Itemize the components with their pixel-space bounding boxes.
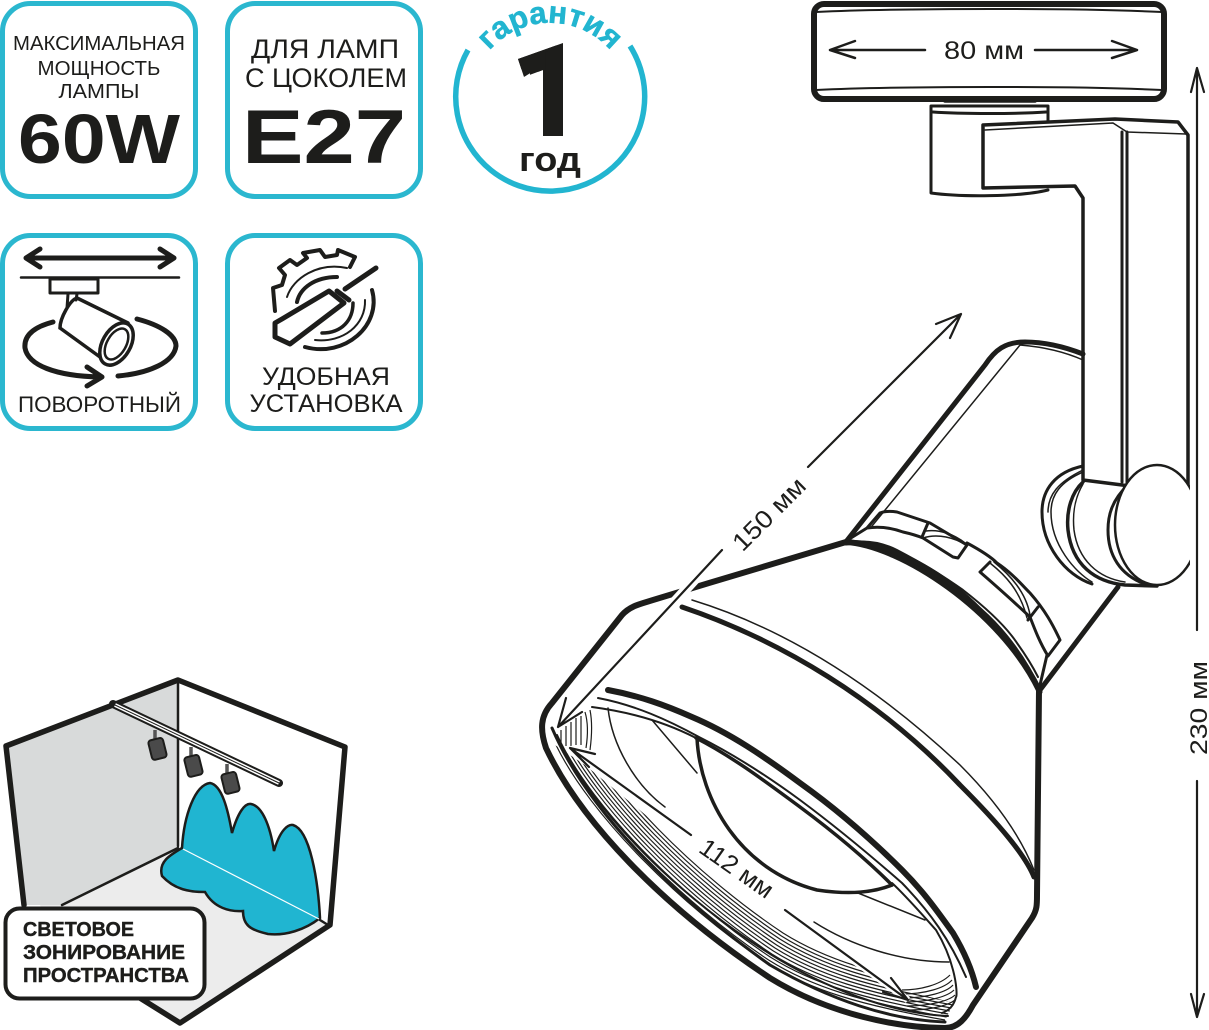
label: light zoning: ПРОСТРАНСТВА bbox=[23, 965, 189, 987]
badge: rotary bbox=[2, 236, 196, 428]
light patch bbox=[161, 783, 320, 934]
connector cylinder bbox=[931, 106, 1048, 196]
icon: gear and screwdriver bbox=[273, 250, 376, 349]
track adapter bbox=[814, 4, 1164, 101]
icon: rotating spotlight bbox=[21, 249, 179, 386]
dimension: 112 mm: 112 мм bbox=[694, 833, 779, 904]
bracket arm bbox=[983, 119, 1188, 490]
dimension: 150 mm bbox=[558, 314, 961, 727]
label: light zoning: ЗОНИРОВАНИЕ bbox=[23, 942, 185, 964]
badge: easy installation: УДОБНАЯ bbox=[262, 363, 390, 391]
label: light zoning: СВЕТОВОЕ bbox=[23, 919, 134, 941]
lamp reflector outline bbox=[542, 542, 1039, 1028]
spotlights bbox=[148, 730, 240, 794]
badge: E27 socket: E27 bbox=[242, 95, 406, 180]
badge: 1 year warranty bbox=[452, 6, 648, 194]
front rim bbox=[552, 690, 976, 1022]
badge: E27 socket: С ЦОКОЛЕМ bbox=[245, 63, 407, 93]
badge: max lamp power 60W bbox=[2, 4, 196, 196]
badge: max lamp power 60W: ЛАМПЫ bbox=[58, 81, 140, 103]
label: light zoning bbox=[6, 908, 204, 998]
lens reflector interior bbox=[608, 708, 949, 962]
dimension: 230 mm bbox=[1186, 68, 1209, 1017]
dimension: 112 mm bbox=[570, 748, 908, 1000]
dimension: 80 mm: 80 мм bbox=[944, 37, 1024, 65]
badge: E27 socket bbox=[228, 4, 420, 196]
rear body cylinder bbox=[845, 342, 1118, 690]
badge: max lamp power 60W: МОЩНОСТЬ bbox=[38, 58, 160, 80]
floor bbox=[40, 848, 330, 1022]
ribbed reflector lines bbox=[556, 710, 961, 1020]
product drawing: track spotlight bbox=[542, 4, 1199, 1028]
left wall bbox=[6, 680, 178, 905]
badge: 1 year warranty: 1 bbox=[506, 14, 582, 165]
pivot joint bbox=[1042, 465, 1199, 586]
lamp band with slots bbox=[846, 511, 1060, 692]
badge: E27 socket: ДЛЯ ЛАМП bbox=[251, 34, 399, 64]
room illustration: light zoning bbox=[6, 680, 345, 1023]
badge: max lamp power 60W: МАКСИМАЛЬНАЯ bbox=[13, 33, 185, 55]
dimension: 80 mm bbox=[830, 37, 1137, 65]
dimension: 150 mm: 150 мм bbox=[727, 472, 812, 557]
badge: max lamp power 60W: 60W bbox=[18, 100, 180, 178]
track rail bbox=[113, 704, 279, 783]
badge: easy installation bbox=[228, 236, 420, 428]
badge: easy installation: УСТАНОВКА bbox=[250, 390, 403, 418]
badge: 1 year warranty: год bbox=[519, 141, 581, 179]
badge: rotary: ПОВОРОТНЫЙ bbox=[18, 392, 181, 417]
